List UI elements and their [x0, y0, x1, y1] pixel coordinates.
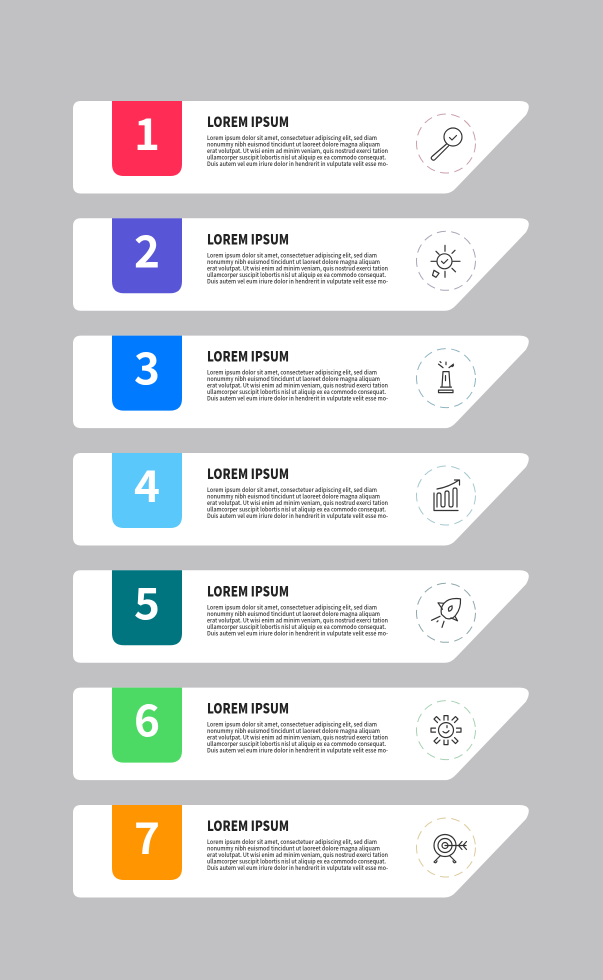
body text 4: [207, 485, 388, 520]
body text 2: [207, 250, 388, 285]
body text 6: Lorem ipsum dolor sit amet, consectetuer adipiscing elit, sed diam: [207, 720, 377, 729]
body text 3: ullamcorper suscipit lobortis nisl ut aliquip ex ea commodo consequat.: [207, 387, 386, 396]
number tab 3: [112, 336, 182, 411]
number tab 1: [112, 101, 182, 176]
body text 5: erat volutpat. Ut wisi enim ad minim veniam, quis nostrud exerci tation: [207, 615, 388, 624]
number tab 4: [112, 453, 182, 528]
body text 3: erat volutpat. Ut wisi enim ad minim veniam, quis nostrud exerci tation: [207, 381, 388, 390]
panel: step 3: [73, 334, 529, 428]
body text 6: erat volutpat. Ut wisi enim ad minim veniam, quis nostrud exerci tation: [207, 733, 388, 742]
number 4: 4: [134, 451, 160, 515]
body text 4: ullamcorper suscipit lobortis nisl ut aliquip ex ea commodo consequat.: [207, 504, 386, 514]
number 5: 5: [134, 568, 160, 632]
number 2: 2: [134, 216, 160, 280]
number 7: 7: [134, 803, 160, 867]
body text 5: Duis autem vel eum iriure dolor in hendrerit in vulputate velit esse mo-: [207, 628, 388, 637]
icon: siren beacon: [416, 349, 476, 408]
panel: step 1: [73, 99, 529, 194]
icon: magnifier with check: [416, 114, 476, 173]
panel: step 7: [73, 803, 529, 898]
icon: sun with check: [416, 231, 476, 290]
body text 5: [207, 602, 388, 637]
body text 7: [207, 837, 388, 872]
body text 6: [207, 720, 388, 755]
panel: step 4: [73, 451, 529, 546]
body text 7: Lorem ipsum dolor sit amet, consectetuer adipiscing elit, sed diam: [207, 837, 377, 846]
body text 7: ullamcorper suscipit lobortis nisl ut aliquip ex ea commodo consequat.: [207, 856, 386, 866]
heading 1: LOREM IPSUM: [207, 112, 289, 132]
body text 5: Lorem ipsum dolor sit amet, consectetuer adipiscing elit, sed diam: [207, 602, 377, 611]
icon: sun with smile: [416, 701, 476, 760]
panel: step 6: [73, 686, 529, 780]
heading 4: LOREM IPSUM: [207, 464, 289, 484]
body text 1: Duis autem vel eum iriure dolor in hendrerit in vulputate velit esse mo-: [207, 159, 388, 168]
icon: rocket: [416, 583, 476, 642]
number 1: 1: [134, 99, 160, 163]
body text 2: nonummy nibh euismod tincidunt ut laoreet dolore magna aliquam: [207, 257, 380, 266]
number tab 6: [112, 688, 182, 763]
heading 5: LOREM IPSUM: [207, 581, 289, 601]
body text 1: nonummy nibh euismod tincidunt ut laoreet dolore magna aliquam: [207, 140, 380, 148]
body text 7: nonummy nibh euismod tincidunt ut laoreet dolore magna aliquam: [207, 844, 380, 852]
number tab 5: [112, 570, 182, 645]
heading 2: LOREM IPSUM: [207, 229, 289, 249]
body text 7: Duis autem vel eum iriure dolor in hendrerit in vulputate velit esse mo-: [207, 863, 388, 872]
number tab 2: [112, 218, 182, 293]
body text 3: [207, 368, 388, 403]
panel: step 2: [73, 216, 529, 311]
panel: step 5: [73, 568, 529, 663]
heading 3: LOREM IPSUM: [207, 347, 289, 367]
body text 4: Lorem ipsum dolor sit amet, consectetuer adipiscing elit, sed diam: [207, 485, 377, 494]
body text 1: [207, 133, 388, 168]
body text 4: erat volutpat. Ut wisi enim ad minim veniam, quis nostrud exerci tation: [207, 498, 388, 507]
body text 6: ullamcorper suscipit lobortis nisl ut aliquip ex ea commodo consequat.: [207, 739, 386, 748]
body text 2: Duis autem vel eum iriure dolor in hendrerit in vulputate velit esse mo-: [207, 276, 388, 285]
body text 1: ullamcorper suscipit lobortis nisl ut aliquip ex ea commodo consequat.: [207, 152, 386, 162]
icon: rising chart: [416, 466, 476, 525]
body text 2: Lorem ipsum dolor sit amet, consectetuer adipiscing elit, sed diam: [207, 250, 377, 259]
body text 4: Duis autem vel eum iriure dolor in hendrerit in vulputate velit esse mo-: [207, 511, 388, 520]
body text 5: ullamcorper suscipit lobortis nisl ut aliquip ex ea commodo consequat.: [207, 622, 386, 631]
number 3: 3: [134, 334, 160, 398]
body text 4: nonummy nibh euismod tincidunt ut laoreet dolore magna aliquam: [207, 492, 380, 500]
body text 2: ullamcorper suscipit lobortis nisl ut aliquip ex ea commodo consequat.: [207, 270, 386, 279]
heading 7: LOREM IPSUM: [207, 816, 289, 836]
body text 6: nonummy nibh euismod tincidunt ut laoreet dolore magna aliquam: [207, 726, 380, 735]
body text 3: Lorem ipsum dolor sit amet, consectetuer adipiscing elit, sed diam: [207, 368, 377, 377]
icon: target with arrow: [416, 818, 476, 877]
body text 3: Duis autem vel eum iriure dolor in hendrerit in vulputate velit esse mo-: [207, 394, 388, 403]
body text 3: nonummy nibh euismod tincidunt ut laoreet dolore magna aliquam: [207, 374, 380, 383]
body text 1: erat volutpat. Ut wisi enim ad minim veniam, quis nostrud exerci tation: [207, 146, 388, 155]
body text 6: Duis autem vel eum iriure dolor in hendrerit in vulputate velit esse mo-: [207, 746, 388, 755]
body text 1: Lorem ipsum dolor sit amet, consectetuer adipiscing elit, sed diam: [207, 133, 377, 142]
number tab 7: [112, 805, 182, 880]
number 6: 6: [134, 686, 160, 750]
body text 7: erat volutpat. Ut wisi enim ad minim veniam, quis nostrud exerci tation: [207, 850, 388, 859]
body text 5: nonummy nibh euismod tincidunt ut laoreet dolore magna aliquam: [207, 609, 380, 618]
body text 2: erat volutpat. Ut wisi enim ad minim veniam, quis nostrud exerci tation: [207, 263, 388, 272]
heading 6: LOREM IPSUM: [207, 699, 289, 719]
